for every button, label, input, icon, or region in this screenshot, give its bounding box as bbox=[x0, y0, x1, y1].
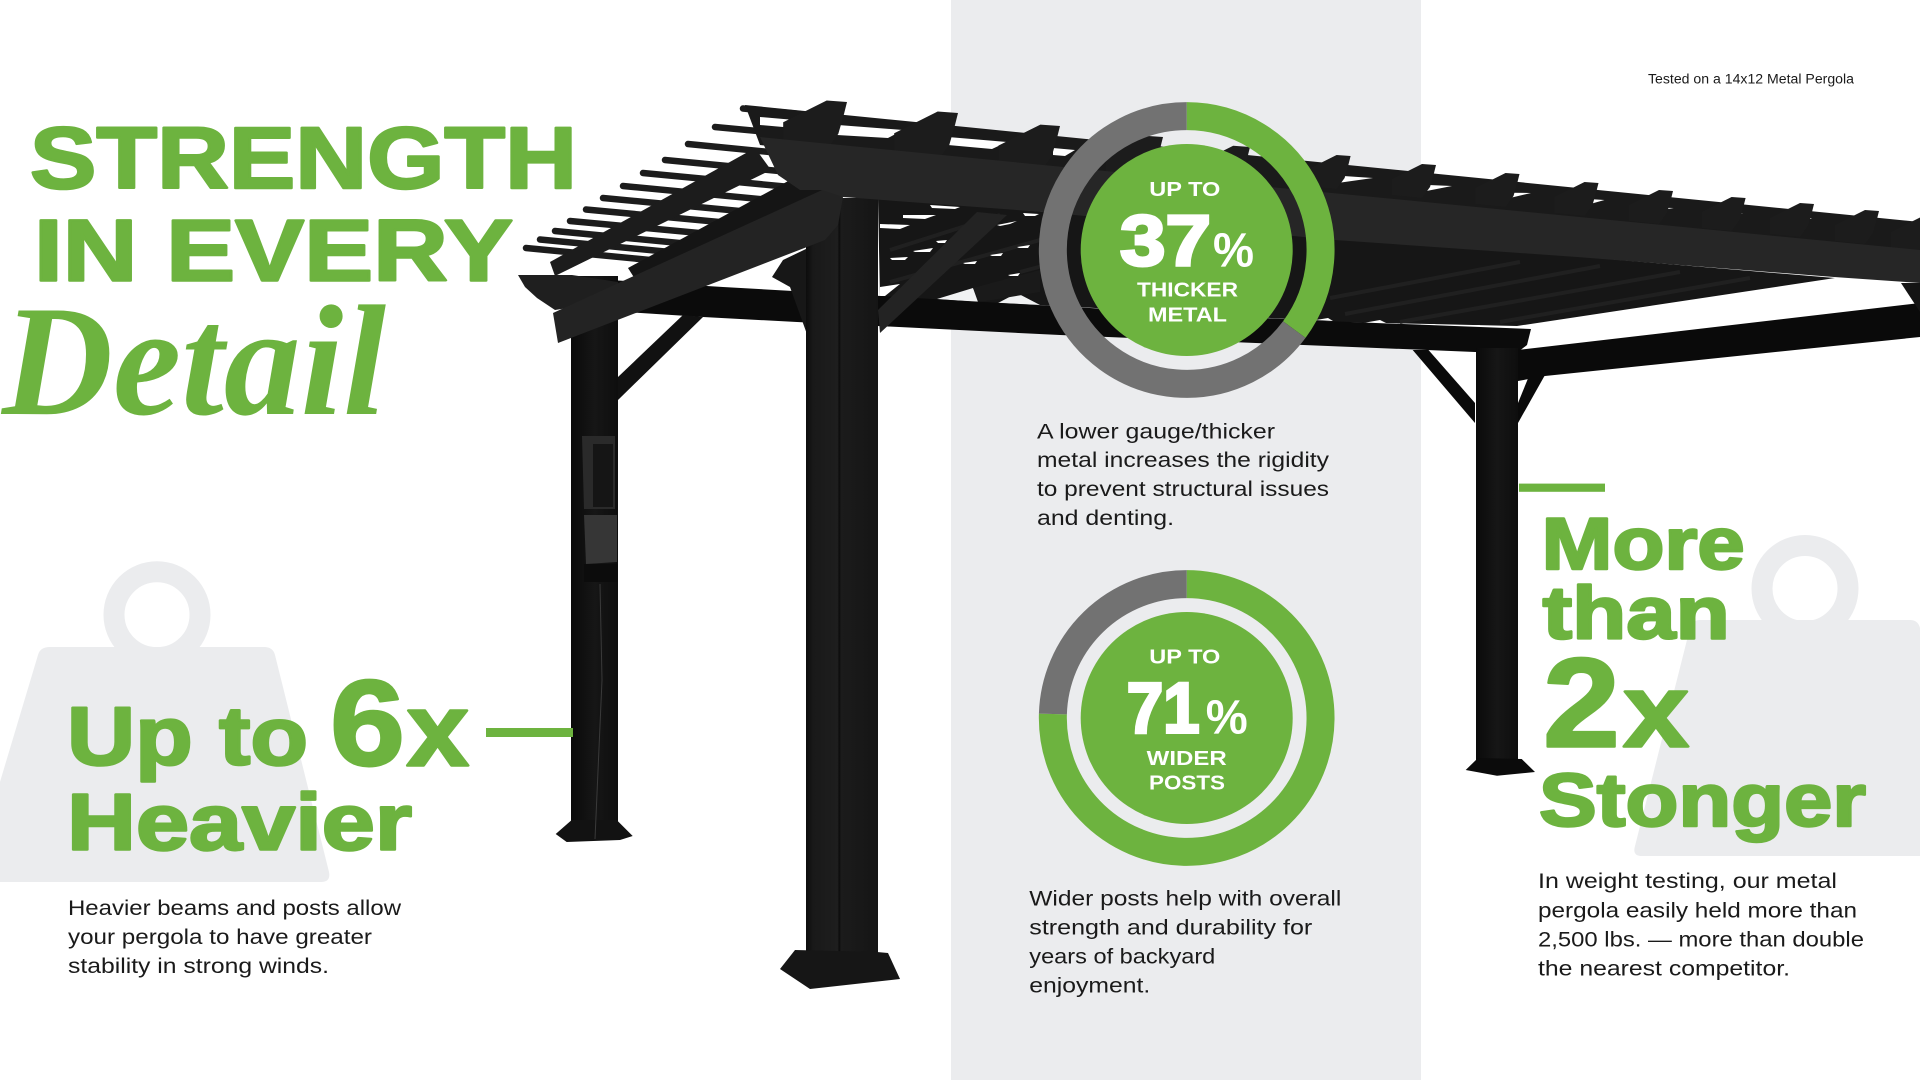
title: Detail bbox=[0, 274, 386, 449]
right lower beam bbox=[1518, 303, 1920, 381]
title bbox=[0, 110, 577, 449]
callout line: stronger bbox=[1519, 484, 1605, 492]
donut label: POSTS bbox=[1149, 772, 1225, 794]
text: weight test description: pergola easily held more than bbox=[1538, 898, 1857, 922]
donut label: UP TO bbox=[1149, 647, 1220, 669]
text: thicker metal description: and denting. bbox=[1037, 506, 1174, 530]
centre disc bbox=[1081, 144, 1293, 356]
text: wider posts description: enjoyment. bbox=[1029, 973, 1150, 997]
donut: 37 percent bbox=[1053, 116, 1321, 384]
centre grey panel bbox=[951, 0, 1421, 1080]
heading: more than 2x stronger: 2 bbox=[1543, 632, 1620, 774]
front post left brace bbox=[772, 248, 808, 337]
text: heavier description bbox=[68, 896, 402, 978]
heading: up to 6x heavier: Heavier bbox=[67, 778, 412, 866]
text: wider posts description: Wider posts help with overall bbox=[1029, 886, 1341, 910]
heading: up to 6x heavier: Up to bbox=[67, 690, 308, 782]
front post bbox=[780, 198, 900, 989]
footnote: tested on: Tested on a 14x12 Metal Pergola bbox=[1648, 71, 1855, 86]
thin diagonal rafter bbox=[550, 148, 771, 276]
diagonal side beam bbox=[553, 180, 845, 343]
heading: more than 2x stronger: More bbox=[1542, 504, 1745, 585]
ring segments bbox=[1053, 584, 1321, 852]
donut label: % bbox=[1206, 692, 1248, 744]
back left post bbox=[556, 276, 633, 842]
text: weight test description: the nearest competitor. bbox=[1538, 957, 1790, 981]
text: wider posts description: strength and durability for bbox=[1029, 916, 1312, 940]
back left brace bbox=[618, 315, 703, 400]
text: thicker metal description: A lower gauge/thicker bbox=[1037, 419, 1275, 443]
front post right brace bbox=[878, 212, 1007, 333]
donut label: 71 bbox=[1127, 670, 1200, 749]
heading: more than 2x stronger: than bbox=[1543, 572, 1730, 655]
text: heavier description: stability in strong winds. bbox=[68, 954, 329, 978]
heading: up to 6x heavier bbox=[67, 655, 469, 866]
text: weight test description bbox=[1538, 869, 1864, 981]
icon: right weight bbox=[1634, 546, 1920, 856]
text: thicker metal description bbox=[1037, 419, 1329, 530]
donut: 71 percent bbox=[1053, 584, 1321, 852]
heading: up to 6x heavier: 6 bbox=[330, 655, 405, 791]
donut label: % bbox=[1213, 225, 1254, 278]
icon: left weight bbox=[0, 572, 329, 882]
text: thicker metal description: metal increases the rigidity bbox=[1037, 448, 1329, 472]
text: thicker metal description: to prevent structural issues bbox=[1037, 477, 1329, 501]
callout line: heavier bbox=[486, 728, 573, 737]
rafter end knuckles bbox=[783, 101, 1920, 251]
text: wider posts description: years of backyard bbox=[1029, 944, 1215, 968]
donut label: METAL bbox=[1148, 305, 1227, 327]
title: STRENGTH bbox=[30, 110, 577, 207]
left roof rails bbox=[526, 108, 800, 260]
heading: more than 2x stronger: Stonger bbox=[1539, 758, 1866, 842]
title: IN EVERY bbox=[34, 202, 513, 299]
rear lower beam bbox=[610, 280, 1531, 352]
text: weight test description: 2,500 lbs. — more than double bbox=[1538, 927, 1864, 951]
pergola illustration bbox=[518, 101, 1920, 989]
donut label: WIDER bbox=[1147, 748, 1227, 770]
donut label bbox=[1127, 647, 1248, 794]
donut label bbox=[1120, 179, 1254, 327]
right post bbox=[1413, 283, 1920, 776]
donut label: THICKER bbox=[1137, 280, 1239, 302]
text: heavier description: Heavier beams and posts allow bbox=[68, 896, 402, 920]
donut label: 37 bbox=[1120, 202, 1211, 281]
ring segments bbox=[1053, 116, 1321, 384]
rafter strip along main beam bbox=[745, 105, 1920, 260]
main front beam bbox=[760, 137, 1920, 283]
heading: up to 6x heavier: x bbox=[406, 672, 469, 788]
heading: more than 2x stronger bbox=[1539, 504, 1866, 842]
underside slats bbox=[878, 198, 1835, 327]
heading: more than 2x stronger: x bbox=[1623, 654, 1689, 770]
donut label: UP TO bbox=[1149, 179, 1220, 201]
text: weight test description: In weight testing, our metal bbox=[1538, 869, 1837, 893]
back corner corbel bbox=[518, 275, 618, 310]
text: wider posts description bbox=[1029, 886, 1341, 997]
text: heavier description: your pergola to have greater bbox=[68, 925, 372, 949]
centre disc bbox=[1081, 612, 1293, 824]
